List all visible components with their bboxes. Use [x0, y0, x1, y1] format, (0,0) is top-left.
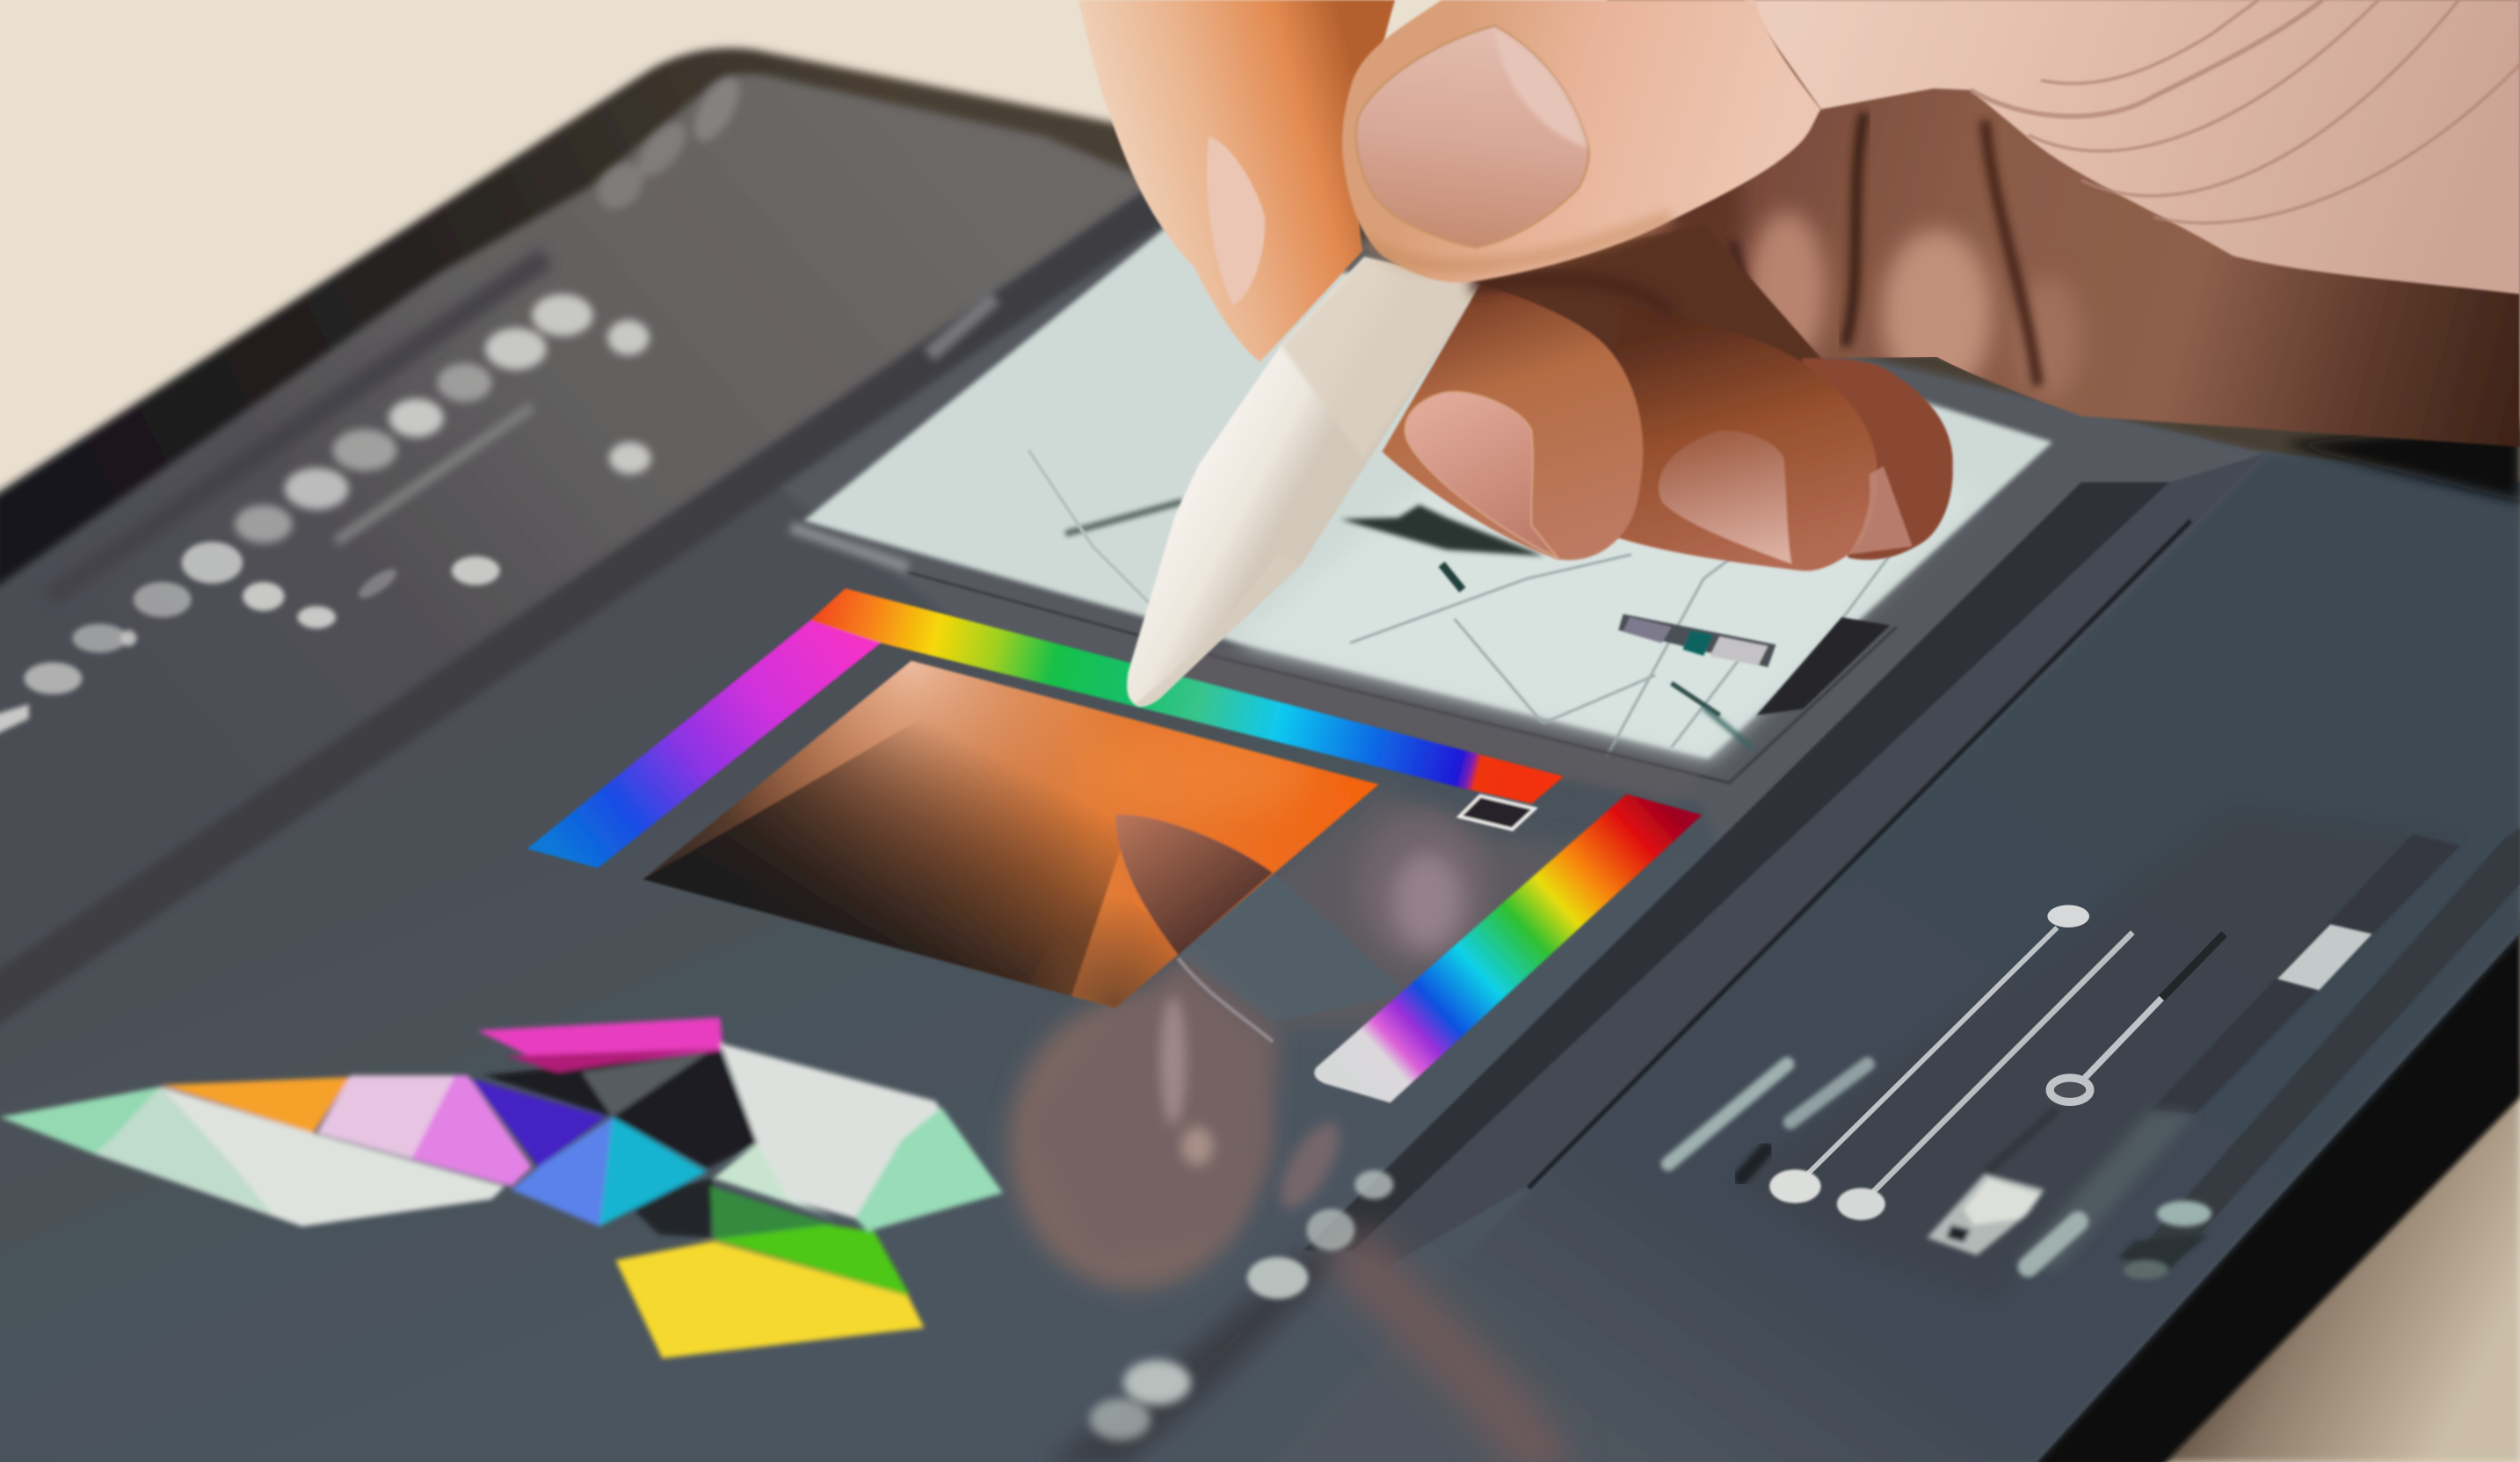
thumbnail lunula highlight — [1494, 29, 1588, 148]
orange shard — [161, 1077, 351, 1133]
mauve tint below canvas — [1157, 635, 1703, 804]
pinky fingernail — [1848, 466, 1913, 555]
vertical hue bar — [1314, 794, 1702, 1102]
swatch icon — [1927, 1174, 2044, 1255]
right white body — [714, 1044, 955, 1218]
slider line two — [1837, 933, 2132, 1220]
palm and back of hand — [1606, 0, 2520, 448]
reflection: lower streak — [1342, 1246, 1550, 1462]
stylus tip facet — [1135, 555, 1302, 706]
ring finger — [1607, 305, 1877, 571]
magenta shard — [477, 1017, 723, 1071]
hand — [1078, 0, 2520, 706]
small dark toggle — [1740, 1149, 1766, 1178]
violet shard — [471, 1079, 606, 1167]
right mint shard — [855, 1108, 1003, 1232]
small swatch selector — [1459, 796, 1535, 829]
drawing canvas: sketch paper — [791, 227, 2052, 804]
canvas frame line — [908, 572, 1897, 782]
index fingernail — [1207, 136, 1265, 305]
ink sketch — [1028, 450, 1897, 755]
bottom toolbar icons — [1090, 1170, 1393, 1440]
shadowed hollow behind the fingers — [1471, 225, 1824, 466]
lower buttons — [2028, 1201, 2211, 1279]
left toolbar shadow stripe — [48, 258, 547, 598]
side track — [2122, 828, 2520, 1269]
top rainbow bar — [810, 588, 1564, 804]
canvas shadow strip — [1756, 617, 1890, 716]
toolbar icons — [0, 295, 1393, 1440]
slider shadow panel — [1736, 804, 2459, 1302]
middle fingernail — [1405, 392, 1559, 559]
lower bezel — [2028, 916, 2520, 1462]
blurred caption near canvas — [929, 297, 995, 355]
panel dark band — [1304, 483, 2169, 1251]
right panel — [1269, 454, 2520, 1462]
pale upper hand — [1744, 0, 2520, 295]
panel edge line — [1527, 520, 2192, 1189]
index finger — [1078, 0, 1395, 361]
panel: reflection of hand on the screen — [1009, 784, 1607, 1462]
strip along paper — [755, 190, 2282, 949]
thumb lower shading — [1366, 217, 1672, 266]
desk corner at bottom right — [2122, 1061, 2520, 1462]
pink shard — [316, 1075, 532, 1186]
slider thumb rectangle — [2277, 924, 2372, 990]
slider line one — [1769, 905, 2089, 1204]
shadow between thumb and fingers — [1471, 279, 1672, 314]
orange saturation square — [643, 661, 1379, 1029]
blurred labels — [1668, 1064, 1868, 1164]
left rainbow bar — [527, 621, 881, 868]
stylus — [1127, 258, 1482, 706]
slider panel — [1668, 804, 2520, 1302]
ring fingernail — [1659, 431, 1792, 564]
colour picker — [527, 588, 1702, 1102]
reflection: mauve area beside the square — [1178, 784, 1607, 1029]
blurred caption at canvas corner — [791, 527, 908, 567]
lighter paper lower half — [1238, 466, 1977, 759]
middle finger — [1382, 285, 1643, 560]
thumb — [1342, 0, 1821, 283]
mint shard — [0, 1087, 161, 1154]
toolbar and upper screen region — [0, 74, 1189, 1029]
skin fold creases — [1971, 0, 2520, 223]
stylus shade under the fingers — [1281, 258, 1482, 458]
dark diagonal band — [0, 190, 1173, 1029]
left white body — [95, 1087, 505, 1226]
low-poly artwork — [0, 1017, 1003, 1358]
pinky finger — [1802, 358, 1953, 560]
palm light patches and creases — [1665, 105, 2081, 398]
blurred lens marks at tablet top — [589, 70, 995, 355]
thumbnail swatches — [1618, 614, 1776, 667]
long vertical slider track — [2150, 834, 2460, 1114]
thumbnail — [1356, 25, 1588, 248]
reflection: large finger — [1009, 1000, 1260, 1289]
top right shadow under hand — [2282, 421, 2520, 501]
reflection: light edge arc — [1178, 958, 1273, 1042]
yellow green square — [615, 1241, 924, 1358]
reflection: lighter slate wedge — [1178, 873, 1406, 1022]
strip between band and line — [1354, 454, 2266, 1269]
slider line three — [1985, 934, 2225, 1174]
lower dark band — [1044, 1251, 1354, 1462]
blue and cyan diamond — [511, 1117, 613, 1226]
fingertip reflection on square — [1115, 815, 1273, 955]
dark green shard — [710, 1186, 836, 1240]
